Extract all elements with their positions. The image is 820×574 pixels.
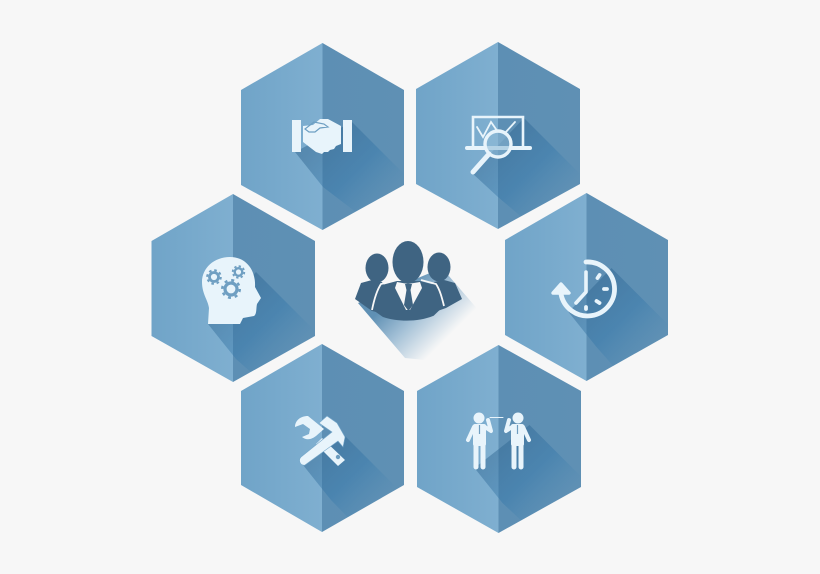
icon: handshake xyxy=(292,119,352,154)
panel: analytics hexagon xyxy=(416,42,580,231)
icon: head with gears xyxy=(202,257,261,324)
icon: two men with string telephone xyxy=(468,412,529,467)
icon shadow xyxy=(358,268,480,360)
icon: clock with arrow xyxy=(553,262,615,316)
icon: business team xyxy=(355,241,462,321)
icon: magnifier over laptop chart xyxy=(467,117,530,172)
panel: clock hexagon xyxy=(505,193,668,381)
panel: tools hexagon xyxy=(241,344,404,532)
panel: handshake hexagon xyxy=(241,43,404,232)
panel: two men hexagon xyxy=(417,345,582,533)
panel: central team icon xyxy=(355,241,480,360)
panel: head with gears hexagon xyxy=(152,194,315,383)
icon: hammer and wrench xyxy=(295,416,345,466)
